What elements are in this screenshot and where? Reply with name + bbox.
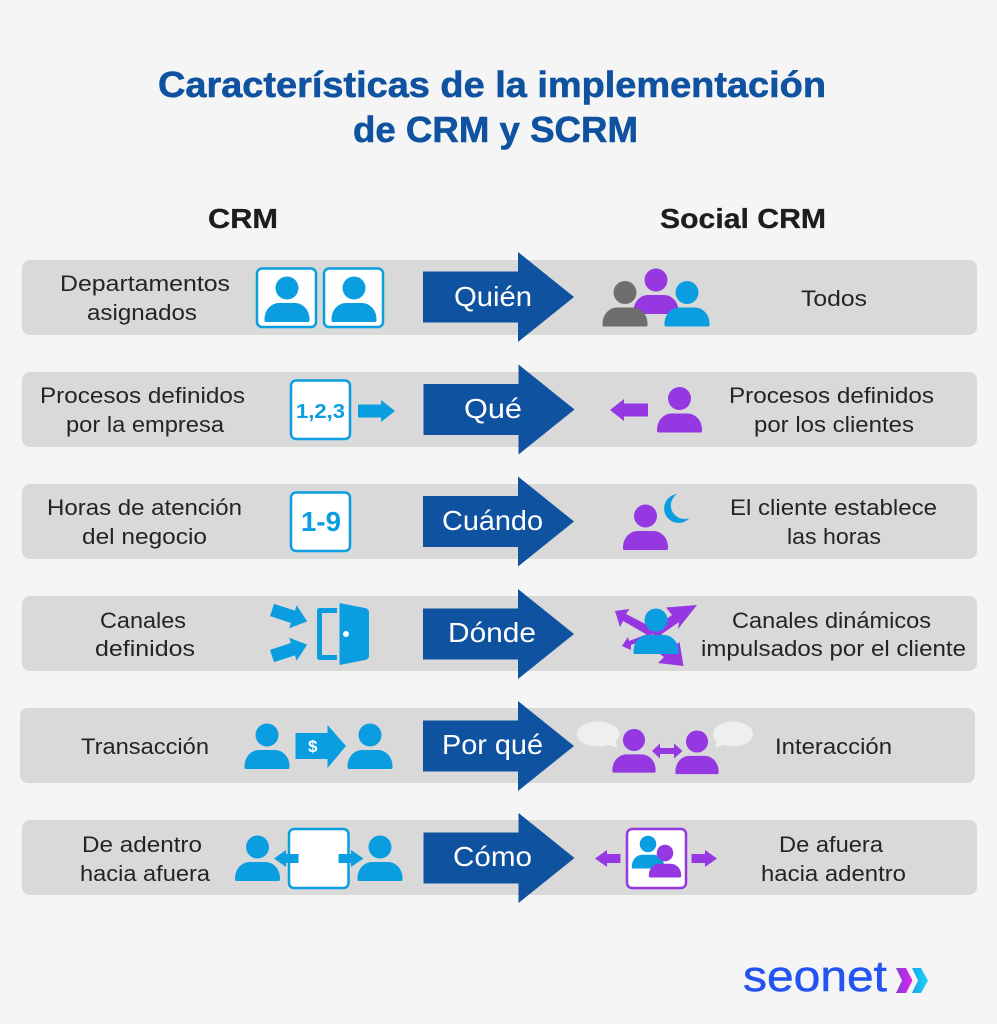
text: Canales dinámicos impulsados por el cliente: impulsados por el cliente	[701, 636, 966, 661]
text: Procesos definidos por los clientes: Procesos definidos	[729, 383, 934, 408]
icon: outside in box with people	[595, 829, 717, 888]
arrow: Dónde	[423, 589, 574, 679]
text: El cliente establece las horas: El cliente establece	[730, 495, 937, 520]
arrow: Por qué	[423, 701, 574, 791]
heading: CRM: CRM	[208, 203, 278, 234]
icon: two assigned people in boxes	[257, 268, 383, 327]
text: Canales definidos: definidos	[95, 636, 195, 661]
text: El cliente establece las horas: las horas	[787, 524, 881, 549]
icon: client with moon	[623, 494, 690, 550]
title	[158, 64, 826, 150]
text: Departamentos asignados: Departamentos	[60, 271, 230, 296]
text: Horas de atención del negocio: Horas de atención	[47, 495, 242, 520]
title: de CRM y SCRM	[353, 109, 638, 150]
arrow: Cómo: Cómo	[453, 841, 532, 872]
text: Horas de atención del negocio: del negocio	[82, 524, 207, 549]
text: Horas de atención del negocio	[47, 495, 242, 549]
icon: money transaction between people	[244, 724, 392, 769]
text: Transacción: Transacción	[81, 734, 209, 759]
arrow: Quién: Quién	[454, 281, 532, 312]
text: De adentro hacia afuera	[80, 832, 211, 886]
icon: client with left arrow	[610, 387, 702, 432]
title: Características de la implementación	[158, 64, 826, 105]
icon: 1,2,3 box with arrow	[291, 380, 395, 439]
text: Canales dinámicos impulsados por el cliente: Canales dinámicos	[732, 608, 931, 633]
text: Procesos definidos por los clientes: por los clientes	[754, 412, 914, 437]
icon: 1,2,3 box with arrow: 1,2,3	[296, 401, 345, 423]
arrow: Cuándo	[423, 476, 574, 566]
text: Procesos definidos por la empresa: por la empresa	[66, 412, 225, 437]
text: Interacción: Interacción	[775, 734, 892, 759]
row: Cuándo	[22, 476, 977, 566]
heading: Social CRM: Social CRM	[660, 203, 826, 234]
icon: group of people	[602, 268, 710, 326]
text: Canales dinámicos impulsados por el cliente	[701, 608, 966, 661]
arrow: Qué	[424, 364, 574, 454]
text: De adentro hacia afuera: hacia afuera	[80, 861, 211, 886]
icon: money transaction between people: $	[308, 737, 318, 756]
text: Todos: Todos	[801, 286, 867, 311]
arrow: Por qué: Por qué	[442, 729, 543, 760]
arrow: Qué: Qué	[464, 393, 522, 424]
icon: 1-9 box	[291, 492, 350, 551]
icon: 1-9 box: 1-9	[301, 506, 341, 537]
arrow: Cómo	[424, 813, 574, 903]
row: Quién	[22, 252, 977, 342]
arrow: Cuándo: Cuándo	[442, 505, 543, 536]
icon: arrows into door	[268, 599, 369, 667]
text: De afuera hacia adentro	[761, 832, 906, 886]
text: Canales definidos: Canales	[100, 608, 186, 633]
text: Departamentos asignados	[60, 271, 230, 325]
row: Por qué	[20, 701, 975, 791]
arrow: Quién	[423, 252, 574, 342]
icon: inside out box with people	[235, 829, 402, 888]
text: Procesos definidos por la empresa	[40, 383, 245, 437]
text: De afuera hacia adentro: hacia adentro	[761, 861, 906, 886]
arrow: Dónde: Dónde	[448, 617, 536, 648]
text: Procesos definidos por la empresa: Procesos definidos	[40, 383, 245, 408]
logo: seonet: seonet	[743, 952, 887, 1001]
row: Qué	[22, 364, 977, 454]
text: Canales definidos	[95, 608, 195, 661]
text: Procesos definidos por los clientes	[729, 383, 934, 437]
row: Dónde	[22, 589, 977, 679]
row: Cómo	[22, 813, 977, 903]
icon: client with dynamic channel arrows	[615, 605, 697, 666]
text: Departamentos asignados: asignados	[87, 300, 197, 325]
text: De adentro hacia afuera: De adentro	[82, 832, 202, 857]
icon: interaction with speech bubbles	[576, 722, 753, 774]
text: El cliente establece las horas	[730, 495, 937, 549]
text: De afuera hacia adentro: De afuera	[779, 832, 884, 857]
